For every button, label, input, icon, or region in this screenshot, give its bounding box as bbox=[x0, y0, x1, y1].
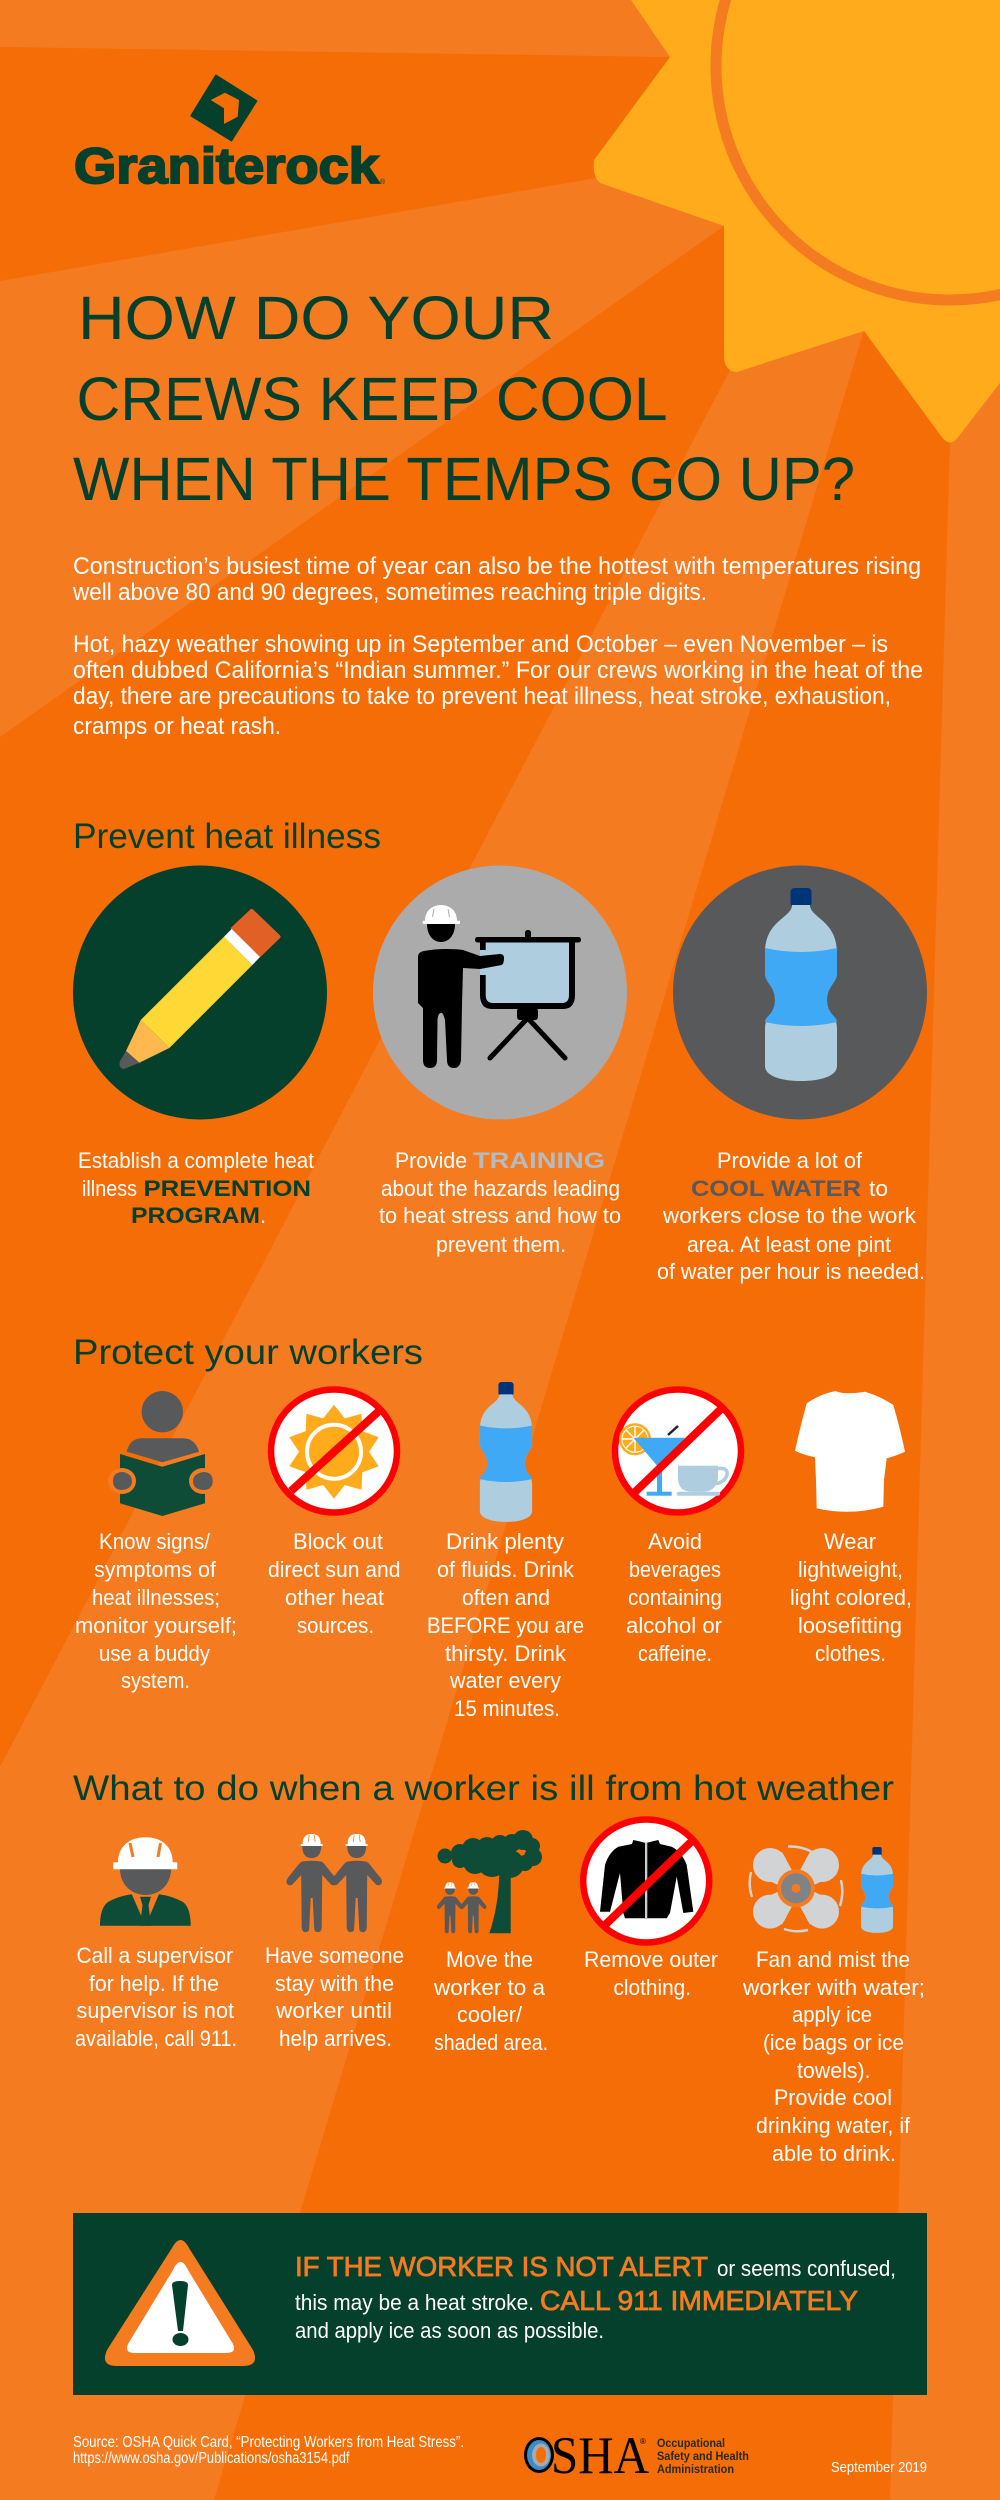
caption: call a supervisor: for help. If the bbox=[89, 1971, 219, 1996]
alert text: or seems confused, bbox=[717, 2256, 896, 2281]
alert text: IF THE WORKER IS NOT ALERT bbox=[295, 2251, 708, 2282]
icon: fan and bottle bbox=[750, 1846, 893, 1933]
caption: training: TRAINING bbox=[473, 1148, 605, 1173]
logo: OSHA: Occupational bbox=[657, 2436, 725, 2450]
panel: prevent heat illness bbox=[73, 817, 927, 1284]
caption: know signs: monitor yourself; bbox=[75, 1613, 237, 1638]
icon: person reading bbox=[108, 1391, 217, 1516]
caption: drink plenty: thirsty. Drink bbox=[445, 1641, 567, 1666]
caption: move the worker: Move the bbox=[446, 1947, 533, 1972]
caption: move the worker bbox=[433, 1947, 548, 2055]
caption: prevention program: PREVENTION bbox=[144, 1176, 311, 1201]
intro text: cramps or heat rash. bbox=[73, 713, 281, 740]
icon: bottle bbox=[480, 1382, 532, 1522]
caption: wear lightweight bbox=[790, 1529, 912, 1666]
intro text: Construction’s busiest time of year can also be the hottest with temperatures rising bbox=[73, 553, 921, 580]
caption: drink plenty bbox=[427, 1529, 584, 1721]
caption: fan and mist: worker with water; bbox=[742, 1975, 925, 2000]
caption: have someone stay: worker until bbox=[275, 1998, 392, 2023]
caption: wear lightweight: Wear bbox=[824, 1529, 876, 1554]
title bbox=[73, 284, 855, 513]
icon: white t-shirt bbox=[795, 1391, 905, 1512]
caption: drink plenty: BEFORE you are bbox=[427, 1613, 584, 1638]
caption: drink plenty: water every bbox=[449, 1668, 561, 1693]
caption: call a supervisor: available, call 911. bbox=[75, 2026, 237, 2051]
caption: prevention program bbox=[78, 1148, 314, 1228]
caption: training bbox=[379, 1148, 621, 1257]
logo: Graniterock: ® bbox=[380, 178, 386, 186]
caption: have someone stay: help arrives. bbox=[279, 2026, 392, 2051]
intro text: often dubbed California’s “Indian summer.” For our crews working in the heat of the bbox=[73, 657, 923, 684]
caption: block out sun bbox=[268, 1529, 400, 1638]
logo: OSHA: Administration bbox=[657, 2462, 734, 2476]
logo: OSHA: SHA bbox=[551, 2427, 649, 2485]
heading: prevent heat illness: Prevent heat illness bbox=[73, 817, 381, 856]
heading: what to do: What to do when a worker is ill from hot weather bbox=[73, 1769, 894, 1808]
caption: cool water: workers close to the work bbox=[662, 1203, 917, 1228]
caption: wear lightweight: lightweight, bbox=[798, 1557, 903, 1582]
caption: call a supervisor bbox=[75, 1943, 237, 2051]
caption: cool water: to bbox=[869, 1176, 888, 1201]
logo: Graniterock: Graniterock bbox=[74, 138, 379, 194]
caption: training: prevent them. bbox=[436, 1232, 566, 1257]
heading: protect your workers: Protect your workers bbox=[73, 1333, 423, 1372]
intro text: Hot, hazy weather showing up in September and October – even November – is bbox=[73, 631, 888, 658]
caption: drink plenty: 15 minutes. bbox=[454, 1696, 560, 1721]
icon: no alcohol or caffeine bbox=[615, 1390, 741, 1512]
panel: alert callout bbox=[73, 2213, 927, 2395]
caption: know signs: use a buddy bbox=[99, 1641, 210, 1666]
caption: cool water: area. At least one pint bbox=[687, 1232, 891, 1257]
caption: wear lightweight: clothes. bbox=[815, 1641, 886, 1666]
source note: https://www.osha.gov/Publications/osha3154.pdf bbox=[73, 2450, 350, 2467]
caption: remove outer clothing: clothing. bbox=[614, 1975, 691, 2000]
icon: trainer at board in grey circle bbox=[373, 866, 627, 1120]
caption: cool water bbox=[657, 1148, 925, 1284]
caption: block out sun: direct sun and bbox=[268, 1557, 400, 1582]
intro text bbox=[72, 553, 923, 740]
icon: remove outer clothing bbox=[583, 1820, 709, 1942]
caption: wear lightweight: loosefitting bbox=[798, 1613, 902, 1638]
source note bbox=[73, 2434, 464, 2467]
caption: avoid beverages: alcohol or bbox=[626, 1613, 722, 1638]
caption: fan and mist: Provide cool bbox=[774, 2085, 892, 2110]
title: CREWS KEEP COOL bbox=[76, 365, 668, 433]
caption: have someone stay bbox=[265, 1943, 404, 2051]
icon: two workers bbox=[286, 1834, 382, 1932]
caption: move the worker: shaded area. bbox=[434, 2030, 548, 2055]
intro text: day, there are precautions to take to prevent heat illness, heat stroke, exhaustion, bbox=[73, 683, 891, 710]
caption: fan and mist: (ice bags or ice bbox=[763, 2030, 904, 2055]
caption: avoid beverages: caffeine. bbox=[638, 1641, 712, 1666]
logo: OSHA: ® bbox=[640, 2437, 646, 2446]
caption: have someone stay: stay with the bbox=[275, 1971, 394, 1996]
caption: fan and mist: towels). bbox=[797, 2058, 870, 2083]
caption: move the worker: cooler/ bbox=[457, 2002, 523, 2027]
caption: block out sun: other heat bbox=[285, 1585, 384, 1610]
caption: avoid beverages: Avoid bbox=[648, 1529, 702, 1554]
caption: avoid beverages: containing bbox=[628, 1585, 722, 1610]
caption: fan and mist: able to drink. bbox=[772, 2141, 896, 2166]
caption: cool water: COOL WATER bbox=[691, 1176, 861, 1201]
caption: fan and mist bbox=[742, 1947, 925, 2166]
caption: fan and mist: apply ice bbox=[792, 2002, 872, 2027]
icon: water bottle in dark circle bbox=[673, 866, 927, 1120]
alert text: this may be a heat stroke. bbox=[295, 2290, 534, 2315]
title: HOW DO YOUR bbox=[78, 284, 554, 352]
caption: prevention program: Establish a complete heat bbox=[78, 1148, 314, 1173]
caption: drink plenty: of fluids. Drink bbox=[437, 1557, 575, 1582]
caption: have someone stay: Have someone bbox=[265, 1943, 404, 1968]
caption: fan and mist: drinking water, if bbox=[756, 2113, 911, 2138]
caption: training: to heat stress and how to bbox=[379, 1203, 621, 1228]
icon: supervisor bbox=[100, 1837, 191, 1926]
caption: remove outer clothing bbox=[584, 1947, 718, 2000]
date: September 2019 bbox=[831, 2459, 927, 2476]
sun bbox=[594, 0, 1000, 442]
panel: what to do when a worker is ill bbox=[73, 1769, 925, 2166]
caption: avoid beverages: beverages bbox=[629, 1557, 721, 1582]
alert text: CALL 911 IMMEDIATELY bbox=[540, 2285, 858, 2316]
caption: know signs bbox=[75, 1529, 237, 1693]
caption: know signs: heat illnesses; bbox=[92, 1585, 220, 1610]
caption: wear lightweight: light colored, bbox=[790, 1585, 912, 1610]
caption: prevention program: illness bbox=[82, 1176, 137, 1201]
source note: Source: OSHA Quick Card, “Protecting Workers from Heat Stress”. bbox=[73, 2434, 464, 2451]
caption: know signs: Know signs/ bbox=[99, 1529, 211, 1554]
caption: know signs: symptoms of bbox=[94, 1557, 217, 1582]
alert text: and apply ice as soon as possible. bbox=[295, 2318, 604, 2343]
caption: cool water: of water per hour is needed. bbox=[657, 1259, 925, 1284]
caption: prevention program: . bbox=[260, 1203, 266, 1228]
caption: drink plenty: Drink plenty bbox=[446, 1529, 564, 1554]
logo: OSHA bbox=[524, 2427, 749, 2485]
caption: training: about the hazards leading bbox=[381, 1176, 620, 1201]
caption: call a supervisor: supervisor is not bbox=[76, 1998, 234, 2023]
caption: remove outer clothing: Remove outer bbox=[584, 1947, 718, 1972]
caption: drink plenty: often and bbox=[462, 1585, 550, 1610]
icon: tree with workers bbox=[437, 1830, 542, 1933]
icon: pencil in green circle bbox=[73, 866, 327, 1120]
panel: protect your workers bbox=[73, 1333, 912, 1721]
intro text: well above 80 and 90 degrees, sometimes reaching triple digits. bbox=[72, 579, 707, 606]
caption: call a supervisor: Call a supervisor bbox=[76, 1943, 233, 1968]
logo: OSHA: Safety and Health bbox=[657, 2449, 749, 2463]
alert text bbox=[295, 2251, 896, 2343]
logo: Graniterock bbox=[74, 74, 386, 194]
caption: block out sun: Block out bbox=[293, 1529, 383, 1554]
icon: no direct sun bbox=[271, 1390, 397, 1512]
title: WHEN THE TEMPS GO UP? bbox=[73, 445, 855, 513]
caption: prevention program: PROGRAM bbox=[131, 1203, 260, 1228]
icon: warning triangle bbox=[105, 2240, 255, 2366]
caption: avoid beverages bbox=[626, 1529, 722, 1666]
caption: know signs: system. bbox=[121, 1668, 190, 1693]
caption: block out sun: sources. bbox=[297, 1613, 374, 1638]
caption: cool water: Provide a lot of bbox=[717, 1148, 863, 1173]
caption: fan and mist: Fan and mist the bbox=[756, 1947, 910, 1972]
caption: training: Provide bbox=[395, 1148, 467, 1173]
caption: move the worker: worker to a bbox=[433, 1975, 546, 2000]
